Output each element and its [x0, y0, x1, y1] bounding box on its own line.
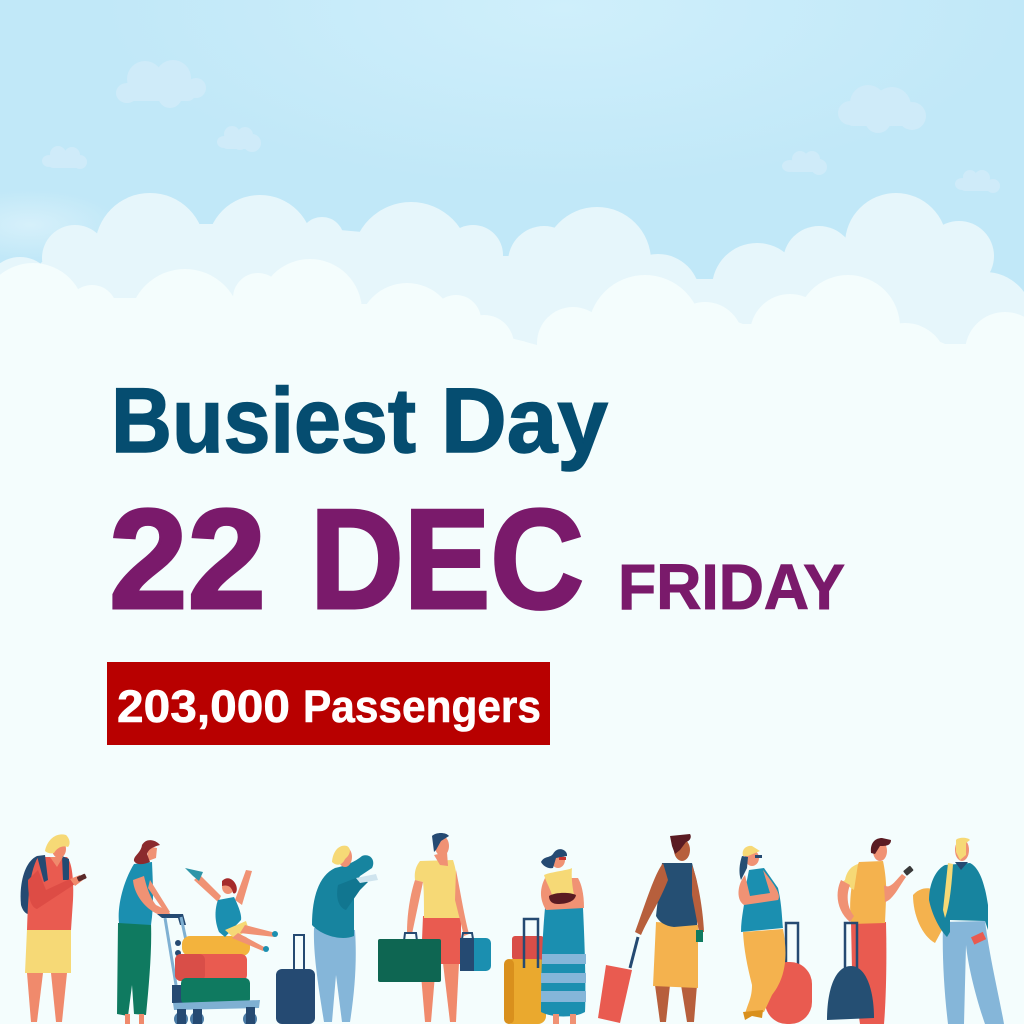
person 9: man with yellow bag and blue sweater: [913, 838, 1004, 1024]
small background clouds: [42, 60, 1000, 193]
title: Busiest Day: Busiest: [111, 370, 416, 472]
child with toy plane on luggage: [185, 868, 278, 952]
date: 22 DEC: [109, 480, 584, 639]
person 1: red shirt with backpack and phone: [21, 834, 87, 1022]
person 5: woman in striped skirt carrying child: [541, 849, 586, 1024]
yellow and red luggage: [504, 919, 546, 1024]
back cloud layer: [0, 193, 1024, 400]
passenger count badge: 203,000: [117, 681, 290, 732]
person 2: woman in teal top pushing cart: [117, 840, 171, 1024]
person 7: woman in hat with red suitcase: [738, 846, 812, 1024]
title: Busiest Day: [111, 370, 608, 472]
front cloud layer: [0, 259, 1024, 1024]
sky background: [0, 0, 1024, 400]
person 6: man in navy vest with red suitcase: [598, 834, 704, 1023]
person 3: woman in teal sweater: [312, 846, 378, 1022]
date: 22 DEC: DEC: [310, 480, 584, 639]
person 8: man in orange shirt with phone and suitcase: [827, 838, 914, 1024]
weekday: FRIDAY: FRIDAY: [618, 551, 845, 623]
person 4: man in yellow shirt with two bags: [378, 833, 491, 1022]
passenger count badge: Passengers: [303, 681, 541, 732]
passenger count badge: [107, 662, 550, 745]
rolling suitcase navy: [276, 935, 315, 1024]
date: 22 DEC: 22: [109, 480, 266, 639]
title: Busiest Day: Day: [441, 370, 608, 472]
luggage cart with suitcases: [157, 914, 260, 1024]
